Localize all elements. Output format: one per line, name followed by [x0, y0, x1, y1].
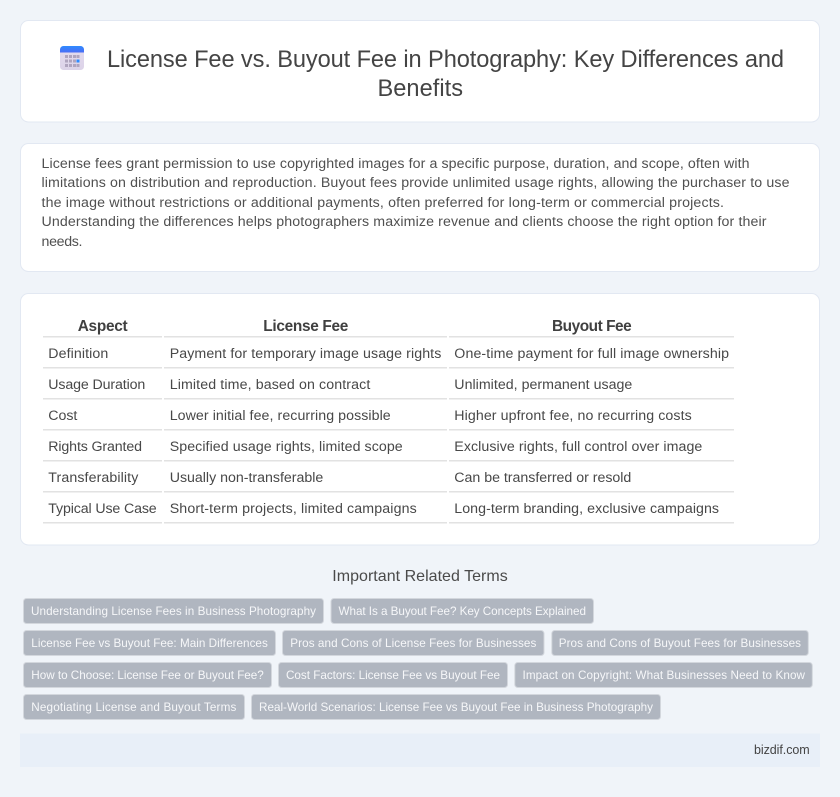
table row: Definition: Payment for temporary image usage rights: [170, 346, 441, 362]
tag: what is a buyout fee: [331, 598, 594, 624]
tag: cost factors: [278, 662, 508, 688]
tag: pros and cons of license fees: [282, 630, 544, 656]
title: License Fee vs. Buyout Fee in Photography: Key Differences and: [107, 47, 784, 73]
table row: Transferability: Transferability: [48, 470, 139, 486]
related term tags: [24, 598, 812, 720]
table row: Cost: Higher upfront fee, no recurring costs: [454, 408, 692, 424]
table row: Usage Duration: Limited time, based on contract: [170, 377, 370, 393]
tag: pros and cons of buyout fees: Pros and Cons of Buyout Fees for Businesses: [559, 637, 801, 650]
table header: Aspect: [78, 318, 128, 335]
table row: Cost: Cost: [48, 408, 77, 424]
tag: impact on copyright: [515, 662, 812, 688]
tag: understanding license fees: Understanding License Fees in Business Photography: [31, 605, 316, 618]
tag: pros and cons of buyout fees: [552, 630, 808, 656]
tag: negotiating terms: [24, 694, 244, 720]
table row: Cost: Lower initial fee, recurring possible: [170, 408, 391, 424]
text block: summary: Understanding the differences helps photographers maximize revenue and clients choose the right option for their: [42, 214, 767, 230]
heading: related terms: Important Related Terms: [332, 568, 508, 585]
text block: summary: limitations on distribution and reproduction. Buyout fees provide unlimited usage rights, allowing the purchaser to use: [42, 175, 790, 191]
text block: summary: needs.: [42, 234, 82, 250]
tag: main differences: [24, 630, 276, 656]
tag: real-world scenarios: [252, 694, 660, 720]
tag: negotiating terms: Negotiating License and Buyout Terms: [31, 701, 236, 714]
icon: calendar: [60, 46, 84, 70]
table row: Definition: One-time payment for full image ownership: [454, 346, 729, 362]
tag: how to choose: How to Choose: License Fee or Buyout Fee?: [31, 669, 264, 682]
panel: summary paragraph: [20, 144, 820, 272]
table row: Usage Duration: [43, 377, 734, 400]
table row: Transferability: Can be transferred or resold: [454, 470, 631, 486]
table row: Typical Use Case: Long-term branding, exclusive campaigns: [454, 501, 719, 517]
table row: Transferability: Usually non-transferable: [170, 470, 323, 486]
panel: header: [20, 20, 820, 122]
table row: Typical Use Case: Typical Use Case: [48, 501, 157, 517]
text block: summary: the image without restrictions or additional payments, often preferred for long-term or commercial projects.: [42, 195, 724, 211]
tag: impact on copyright: Impact on Copyright: What Businesses Need to Know: [522, 669, 806, 682]
table row: Cost: [43, 408, 734, 430]
table header: License Fee: [263, 318, 349, 335]
tag: what is a buyout fee: What Is a Buyout Fee? Key Concepts Explained: [338, 605, 586, 618]
table row: Usage Duration: Unlimited, permanent usage: [454, 377, 632, 393]
table row: Rights Granted: Specified usage rights, limited scope: [170, 439, 403, 455]
table row: Usage Duration: Usage Duration: [48, 377, 145, 393]
text block: summary: License fees grant permission to use copyrighted images for a specific purpose, duration, and scope, often with: [42, 156, 750, 172]
footer: [20, 734, 820, 767]
table row: Rights Granted: Exclusive rights, full control over image: [454, 439, 702, 455]
tag: pros and cons of license fees: Pros and Cons of License Fees for Businesses: [290, 637, 536, 650]
table row: Definition: Definition: [48, 346, 108, 362]
table header: Buyout Fee: [552, 318, 632, 335]
tag: cost factors: Cost Factors: License Fee vs Buyout Fee: [286, 669, 500, 682]
table row: Transferability: [43, 470, 734, 492]
title: Benefits: [378, 76, 463, 102]
footer source link: bizdif.com: [754, 743, 810, 757]
tag: how to choose: [24, 662, 272, 688]
tag: main differences: License Fee vs Buyout Fee: Main Differences: [31, 637, 268, 650]
table row: Typical Use Case: Short-term projects, limited campaigns: [170, 501, 417, 517]
table row: Definition: [43, 346, 734, 368]
table header: [43, 318, 734, 338]
table row: Typical Use Case: [43, 501, 734, 524]
text block: summary: [42, 156, 790, 250]
panel: comparison table: [20, 294, 820, 545]
title: [107, 47, 784, 102]
table row: Rights Granted: Rights Granted: [48, 439, 142, 455]
tag: understanding license fees: [24, 598, 324, 624]
table row: Rights Granted: [43, 439, 734, 462]
tag: real-world scenarios: Real-World Scenarios: License Fee vs Buyout Fee in Business Photography: [259, 701, 653, 714]
